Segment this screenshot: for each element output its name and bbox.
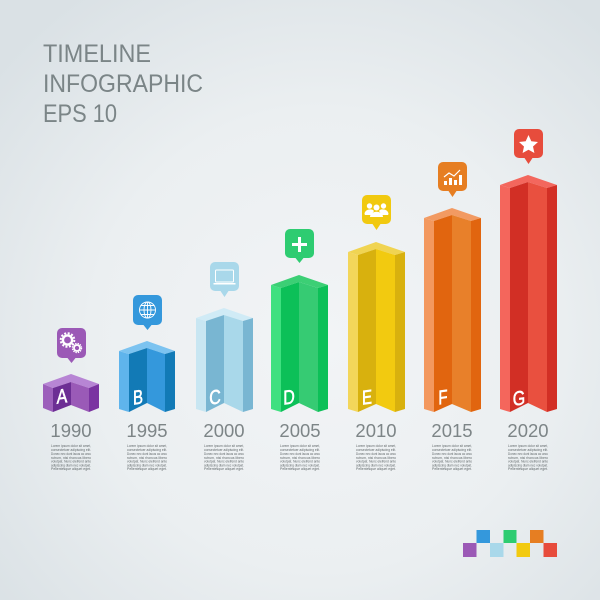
icon: gears pin <box>57 328 86 363</box>
letter G: G <box>513 387 525 410</box>
column 1990: volutpat. Nunc eleifend ante <box>51 458 92 464</box>
column 2015 <box>431 420 473 471</box>
column 1995: Lorem ipsum dolor sit amet, <box>127 443 167 448</box>
column 2000: 2000 <box>203 420 245 441</box>
bar D 2005 <box>271 275 328 412</box>
icon: laptop pin <box>210 262 239 297</box>
column 2000 <box>203 420 245 471</box>
column 2010: Lorem ipsum dolor sit amet, <box>356 443 396 448</box>
column 1990: consectetuer adipiscing elit. <box>51 447 91 452</box>
letter B: B <box>133 385 143 409</box>
letter A: A <box>57 385 68 408</box>
title <box>43 40 203 128</box>
icon: people pin <box>362 195 391 230</box>
column 2020: Pellentesque aliquet eget. <box>508 466 548 471</box>
column 1995: Pellentesque aliquet eget. <box>127 466 167 471</box>
column 2020: consectetuer adipiscing elit. <box>508 447 548 452</box>
column 1995: rutrum, nisi rhoncus libero <box>127 455 168 460</box>
column 2020: 2020 <box>507 420 549 441</box>
title: EPS 10 <box>43 100 117 128</box>
title: INFOGRAPHIC <box>43 70 203 98</box>
column 2010: Pellentesque aliquet eget. <box>356 466 396 471</box>
column 2005: 2005 <box>279 420 321 441</box>
column 2005: volutpat. Nunc eleifend ante <box>280 458 321 464</box>
column 2000: Donec nec dunt lacus ac arcu <box>204 451 244 456</box>
column 1995: 1995 <box>126 420 168 441</box>
column 2000: adipiscing diam nec volutpat. <box>204 462 244 468</box>
bar B 1995 <box>119 341 175 412</box>
column 2010: volutpat. Nunc eleifend ante <box>356 458 397 464</box>
icon: growth chart pin <box>438 162 467 197</box>
column 2005: adipiscing diam nec volutpat. <box>280 462 320 468</box>
column 2010: 2010 <box>355 420 397 441</box>
column 2020: rutrum, nisi rhoncus libero <box>508 455 549 460</box>
bar F 2015 <box>424 208 481 412</box>
column 2005: consectetuer adipiscing elit. <box>280 447 320 452</box>
letter F: F <box>438 385 448 409</box>
column 1990: 1990 <box>50 420 92 441</box>
column 2010 <box>355 420 397 471</box>
column 2010: rutrum, nisi rhoncus libero <box>356 455 397 460</box>
column 2015: volutpat. Nunc eleifend ante <box>432 458 473 464</box>
title: TIMELINE <box>43 40 151 68</box>
column 2005: Pellentesque aliquet eget. <box>280 466 320 471</box>
column 2015: Pellentesque aliquet eget. <box>432 466 472 471</box>
column 2000: Pellentesque aliquet eget. <box>204 466 244 471</box>
column 2015: 2015 <box>431 420 473 441</box>
column 2015: adipiscing diam nec volutpat. <box>432 462 472 468</box>
column 1995: adipiscing diam nec volutpat. <box>127 462 167 468</box>
bar C 2000 <box>196 308 253 412</box>
column 2015: consectetuer adipiscing elit. <box>432 447 472 452</box>
column 1995 <box>126 420 168 471</box>
column 2005: Donec nec dunt lacus ac arcu <box>280 451 320 456</box>
column 2005: Lorem ipsum dolor sit amet, <box>280 443 320 448</box>
column 1990: Pellentesque aliquet eget. <box>51 466 91 471</box>
icon: globe pin <box>133 295 162 330</box>
column 2000: Lorem ipsum dolor sit amet, <box>204 443 244 448</box>
column 2020 <box>507 420 549 471</box>
column 2020: adipiscing diam nec volutpat. <box>508 462 548 468</box>
column 2005 <box>279 420 321 471</box>
column 2000: volutpat. Nunc eleifend ante <box>204 458 245 464</box>
column 2015: rutrum, nisi rhoncus libero <box>432 455 473 460</box>
column 2000: consectetuer adipiscing elit. <box>204 447 244 452</box>
column 2015: Lorem ipsum dolor sit amet, <box>432 443 472 448</box>
bar E 2010 <box>348 242 405 412</box>
column 2005: rutrum, nisi rhoncus libero <box>280 455 321 460</box>
column 2020: volutpat. Nunc eleifend ante <box>508 458 549 464</box>
column 2010: consectetuer adipiscing elit. <box>356 447 396 452</box>
column 1995: Donec nec dunt lacus ac arcu <box>127 451 167 456</box>
bar G 2020 <box>500 175 557 412</box>
column 1995: consectetuer adipiscing elit. <box>127 447 167 452</box>
letter E: E <box>362 385 372 409</box>
column 2020: Donec nec dunt lacus ac arcu <box>508 451 548 456</box>
column 2015: Donec nec dunt lacus ac arcu <box>432 451 472 456</box>
column 1990: Donec nec dunt lacus ac arcu <box>51 451 91 456</box>
column 2010: adipiscing diam nec volutpat. <box>356 462 396 468</box>
column 1990: rutrum, nisi rhoncus libero <box>51 455 92 460</box>
column 1990: adipiscing diam nec volutpat. <box>51 462 91 468</box>
column 2020: Lorem ipsum dolor sit amet, <box>508 443 548 448</box>
icon: plus pin <box>285 229 314 263</box>
column 2000: rutrum, nisi rhoncus libero <box>204 455 245 460</box>
letter C: C <box>209 386 221 409</box>
column 1995: volutpat. Nunc eleifend ante <box>127 458 168 464</box>
bar A 1990 <box>43 374 99 412</box>
column 2010: Donec nec dunt lacus ac arcu <box>356 451 396 456</box>
colour swatches <box>463 530 557 557</box>
letter D: D <box>283 386 295 409</box>
column 1990 <box>50 420 92 471</box>
icon: star pin <box>514 129 543 164</box>
column 1990: Lorem ipsum dolor sit amet, <box>51 443 91 448</box>
